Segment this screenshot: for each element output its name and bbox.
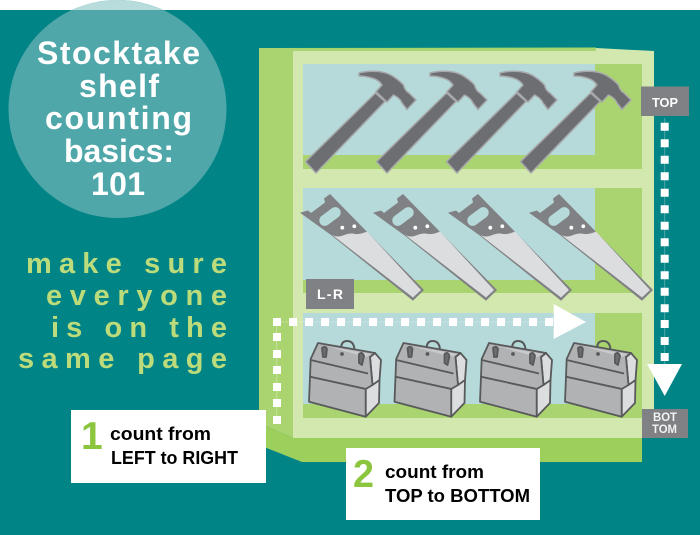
toolboxes bbox=[309, 341, 637, 417]
label: bottom bbox=[642, 409, 688, 438]
title text: counting bbox=[45, 100, 192, 136]
label: top: TOP bbox=[652, 95, 678, 110]
title text: shelf bbox=[79, 68, 159, 104]
shelf 1 bbox=[303, 64, 642, 169]
title text: Stocktake bbox=[37, 35, 200, 71]
callout 2: TOP to BOTTOM bbox=[385, 486, 530, 506]
label: bottom: TOM bbox=[652, 422, 677, 436]
tagline bbox=[18, 248, 227, 375]
arrow: left to right bbox=[273, 304, 586, 424]
tagline: is on the bbox=[51, 312, 227, 344]
shelf 3 bbox=[303, 313, 642, 418]
callout 2: count from bbox=[385, 462, 484, 482]
callout 2: 2 bbox=[353, 453, 374, 496]
title text bbox=[37, 35, 200, 202]
saws bbox=[300, 194, 653, 301]
callout 1: 1 bbox=[81, 415, 103, 458]
callout 1: LEFT to RIGHT bbox=[111, 448, 238, 468]
callout 1 bbox=[71, 410, 266, 483]
arrow: top to bottom bbox=[647, 118, 682, 396]
tagline: make sure bbox=[26, 248, 227, 280]
tagline: same page bbox=[18, 343, 227, 375]
shelf unit bbox=[259, 48, 654, 462]
hammers bbox=[306, 71, 631, 173]
title text: basics: bbox=[64, 133, 174, 169]
callout 1: count from bbox=[110, 424, 211, 444]
tagline: everyone bbox=[46, 280, 227, 312]
title text: 101 bbox=[91, 166, 145, 202]
label: bottom: BOT bbox=[653, 410, 678, 424]
label: left to right: L - R bbox=[317, 286, 343, 302]
title circle bbox=[8, 0, 226, 218]
shelf 2 bbox=[303, 188, 642, 293]
label: top bbox=[641, 86, 689, 116]
callout 2 bbox=[346, 448, 540, 520]
label: left to right bbox=[306, 279, 354, 309]
